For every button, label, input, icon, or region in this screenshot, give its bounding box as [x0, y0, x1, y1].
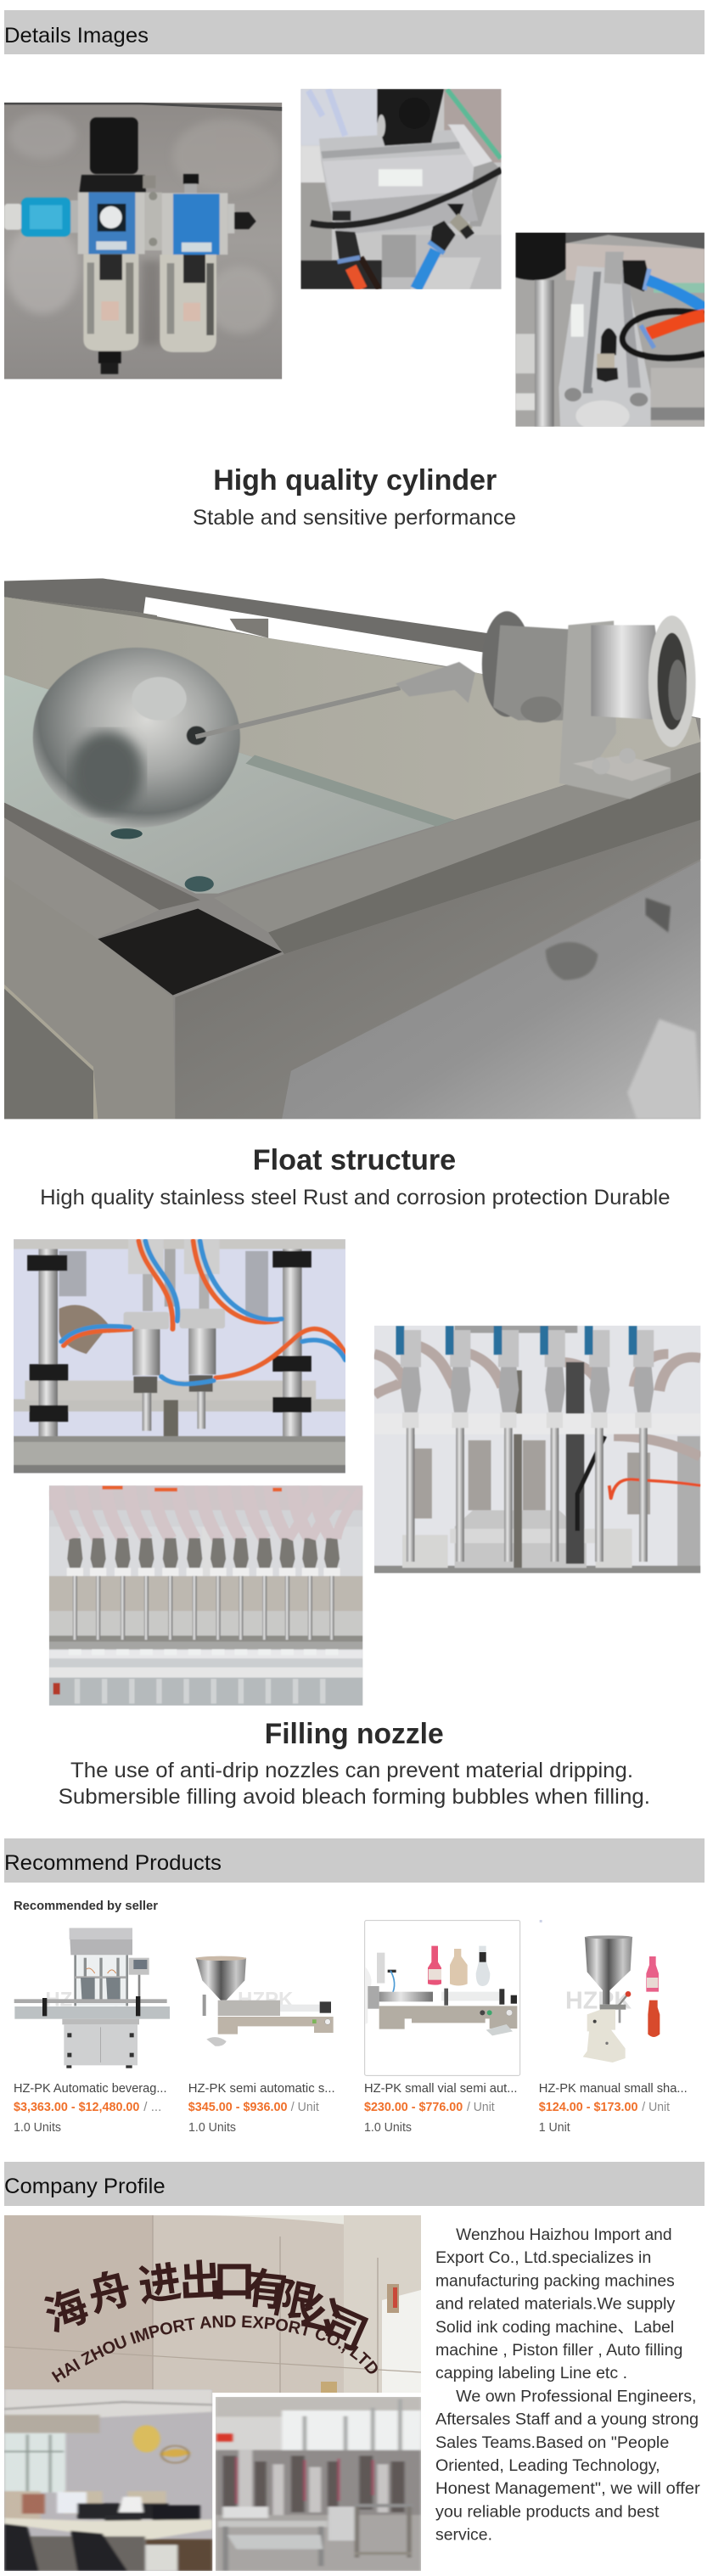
- product card: semi automatic piston filler: / Unit: [291, 2100, 320, 2114]
- photo: six-head filling nozzle row: [373, 1326, 701, 1574]
- photo: office wall sign: HAI ZHOU IMPORT AND EXPORT CO., LTD: [51, 2315, 378, 2383]
- photo: office interior: [4, 2389, 212, 2571]
- heading and text: filling nozzle: Filling nozzle: [265, 1718, 444, 1750]
- photo: float ball valve in stainless tank: [4, 578, 701, 1119]
- company profile text block: capping labeling Line etc .: [435, 2365, 627, 2382]
- product card: manual small shampoo filler: $124.00 - $173.00: [539, 2100, 638, 2114]
- product card: automatic beverage filler: HZ-PK Automatic beverag...: [14, 2081, 166, 2096]
- product card: automatic beverage filler: / ...: [143, 2100, 161, 2114]
- heading and text: filling nozzle: The use of anti-drip nozzles can prevent material dripping.: [70, 1759, 633, 1782]
- sign characters: 司: [316, 2298, 374, 2360]
- section header: Company Profile: Company Profile: [4, 2175, 166, 2198]
- product card: manual small shampoo filler: HZ-PK manual small sha...: [539, 2081, 688, 2096]
- product card: automatic beverage filler: [14, 1928, 170, 2135]
- company profile text block: Aftersales Staff and a young strong: [435, 2411, 699, 2429]
- product card: semi automatic piston filler: $345.00 - $936.00: [188, 2100, 287, 2114]
- product card: small vial filler: HZ-PK small vial semi aut...: [364, 2081, 518, 2096]
- product card: semi automatic piston filler: [188, 1956, 335, 2135]
- photo: air filter regulator unit: [4, 102, 282, 379]
- product card: manual small shampoo filler: / Unit: [642, 2100, 671, 2114]
- product image: hopper piston filler: [195, 1956, 334, 2046]
- heading and text: float structure: Float structure: [253, 1144, 456, 1176]
- company profile text block: Solid ink coding machine、Label: [435, 2319, 674, 2337]
- sign characters: 进: [135, 2258, 184, 2310]
- section header: Company Profile: [4, 2162, 705, 2206]
- photo: factory workshop: [216, 2397, 421, 2571]
- company profile text block: Export Co., Ltd.specializes in: [435, 2249, 651, 2267]
- product image: automatic filling line: K: [113, 1988, 128, 2011]
- product card: small vial filler: $230.00 - $776.00: [364, 2100, 463, 2114]
- heading and text: filling nozzle: [59, 1718, 650, 1809]
- product card: semi automatic piston filler: HZ-PK semi automatic s...: [188, 2081, 335, 2096]
- company profile text block: service.: [435, 2527, 492, 2545]
- sign english line: [57, 2327, 371, 2383]
- company profile text block: Wenzhou Haizhou Import and: [456, 2226, 672, 2244]
- company profile text block: manufacturing packing machines: [435, 2272, 675, 2290]
- company profile text block: We own Professional Engineers,: [456, 2388, 696, 2405]
- product card: manual small shampoo filler: 1 Unit: [539, 2120, 570, 2135]
- product card: small vial filler: 1.0 Units: [364, 2120, 412, 2135]
- product card: automatic beverage filler: $3,363.00 - $12,480.00: [14, 2100, 139, 2114]
- photo: two filling nozzles close-up: [14, 1239, 345, 1473]
- sign characters: 出: [178, 2257, 222, 2306]
- heading and text: float structure: [40, 1144, 671, 1209]
- section header: Recommend Products: [4, 1838, 705, 1883]
- company profile text block: machine , Piston filler , Auto filling: [435, 2342, 682, 2360]
- company profile text block: [435, 2226, 700, 2545]
- sign characters: 舟: [83, 2265, 136, 2321]
- heading and text: high quality cylinder: Stable and sensitive performance: [193, 506, 516, 530]
- product card: small vial filler: [364, 1921, 520, 2135]
- section header: Details Images: [4, 10, 705, 54]
- product card: manual small shampoo filler: [539, 1920, 688, 2135]
- heading and text: high quality cylinder: [193, 464, 516, 530]
- section header: Recommend Products: Recommend Products: [4, 1851, 222, 1875]
- company profile text block: Sales Teams.Based on "People: [435, 2434, 669, 2452]
- product image: manual hopper filler: HZPK: [565, 1988, 632, 2015]
- product image: automatic filling line: [14, 1928, 170, 2068]
- section header: Details Images: Details Images: [4, 24, 149, 48]
- heading and text: float structure: High quality stainless steel Rust and corrosion protection Durable: [40, 1186, 671, 1209]
- sign characters: 海: [38, 2281, 94, 2341]
- company profile text block: Honest Management", we will offer: [435, 2480, 700, 2498]
- photo: twelve-head filling line: [49, 1485, 363, 1706]
- sign characters: [38, 2257, 374, 2360]
- company profile text block: and related materials.We supply: [435, 2296, 676, 2314]
- company profile text block: Oriented, Leading Technology,: [435, 2457, 660, 2475]
- sign characters: 口: [213, 2258, 255, 2305]
- product image: vial filler with bottles: [364, 1920, 521, 2076]
- product image: manual hopper filler: [540, 1920, 660, 2062]
- heading and text: filling nozzle: Submersible filling avoid bleach forming bubbles when filling.: [59, 1785, 650, 1809]
- photo: office wall sign: [4, 2215, 421, 2393]
- sign characters: 限: [270, 2273, 321, 2329]
- photo: compact pneumatic cylinder top view: [300, 88, 502, 289]
- product image: hopper piston filler: HZPK: [238, 1988, 294, 2011]
- subheading: Recommended by seller: Recommended by seller: [14, 1899, 158, 1913]
- photo: cylinder with blue and red air lines: [515, 233, 705, 427]
- product card: semi automatic piston filler: 1.0 Units: [188, 2120, 236, 2135]
- heading and text: high quality cylinder: High quality cylinder: [213, 464, 497, 497]
- product image: automatic filling line: HZ: [45, 1988, 72, 2011]
- product card: automatic beverage filler: 1.0 Units: [14, 2120, 61, 2135]
- product card: small vial filler: / Unit: [467, 2100, 495, 2114]
- sign characters: 有: [242, 2265, 289, 2315]
- sign characters: 公: [293, 2287, 348, 2344]
- company profile text block: you reliable products and best: [435, 2503, 660, 2521]
